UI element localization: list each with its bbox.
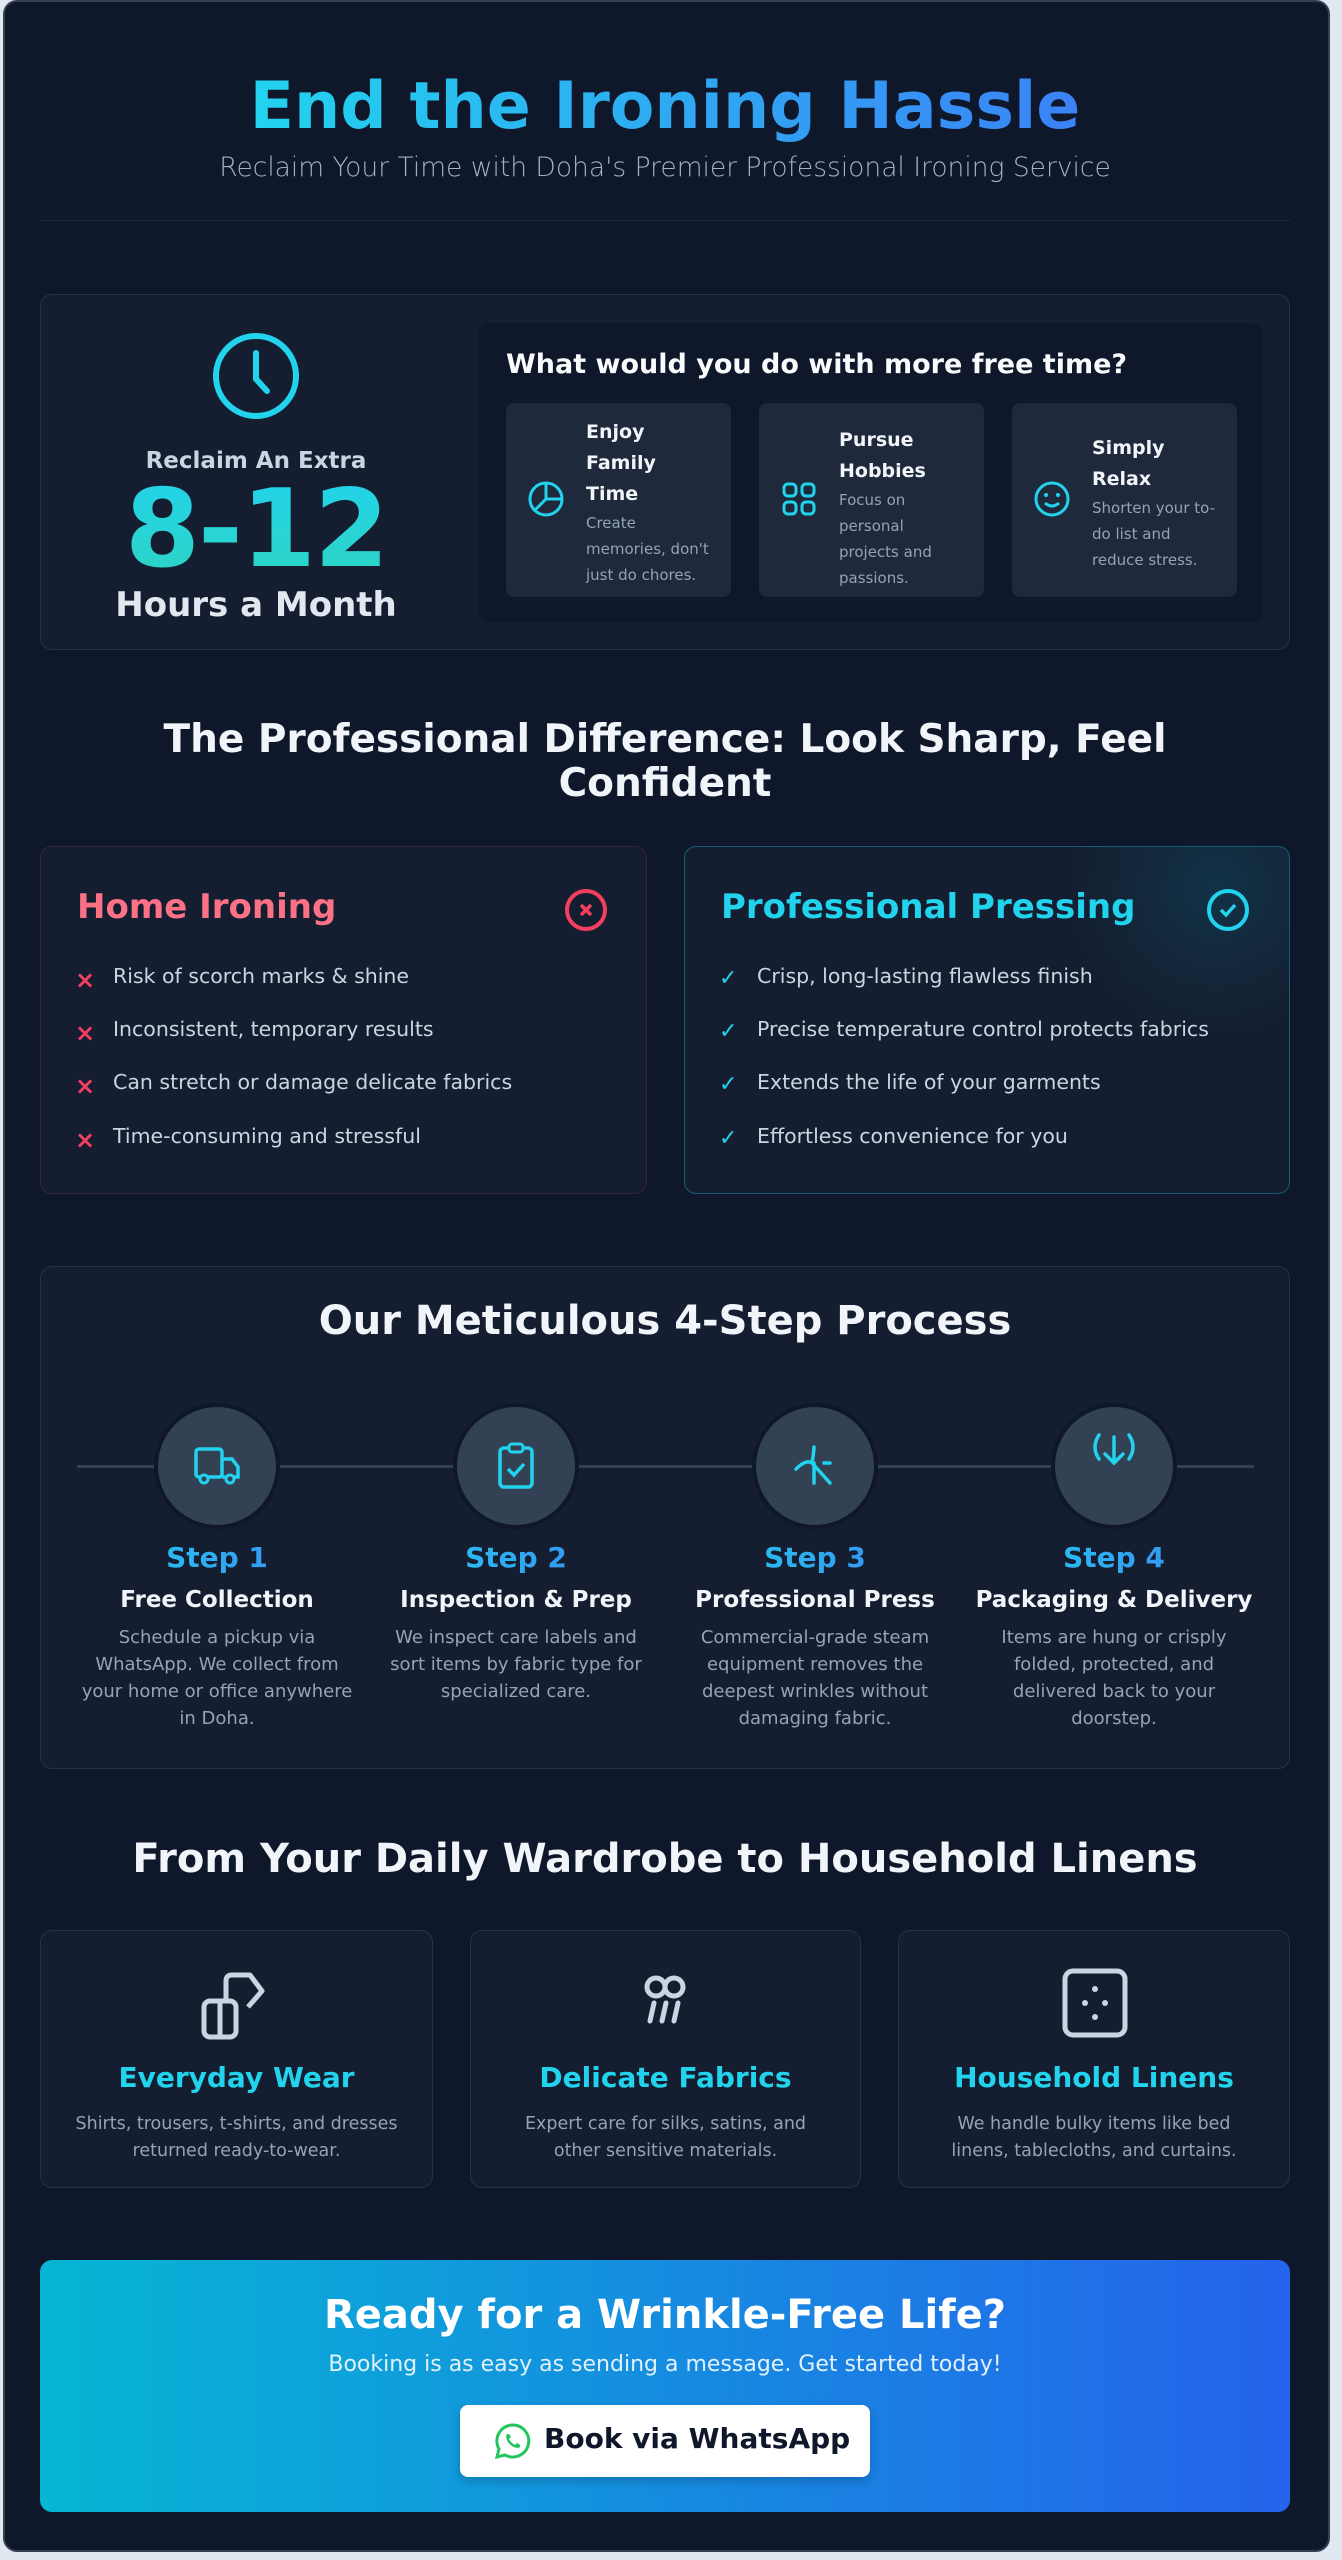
panel: professional pressing: Professional Pressing [721,887,1135,927]
card: hobbies [759,403,984,597]
panel: professional pressing [684,846,1290,1194]
button [460,2405,870,2477]
CTA heading: Ready for a Wrinkle-Free Life? [324,2292,1006,2338]
stat text: 8-12 [125,467,387,592]
heading: What would you do with more free time? [506,349,1127,380]
step 2: We inspect care labels and sort items by fabric type for specialized care. [390,1627,642,1702]
heading: process: Our Meticulous 4-Step Process [319,1298,1011,1344]
card: household linens: We handle bulky items like bed linens, tablecloths, and curtains. [951,2114,1237,2161]
title: End the Ironing Hassle [250,69,1080,144]
step 1: Free Collection [120,1587,314,1613]
list: ✓ [719,966,737,991]
step 1 [82,1407,352,1729]
card: delicate fabrics: Delicate Fabrics [539,2061,792,2094]
CTA subtext: Booking is as easy as sending a message. Get started today! [328,2352,1002,2377]
card: hobbies: Focus on personal projects and passions. [839,491,932,587]
step 2: Inspection & Prep [400,1587,632,1613]
panel: process [40,1266,1290,1769]
icon: whatsapp [495,2424,530,2459]
step 3: Professional Press [695,1587,935,1613]
card: family: Enjoy [586,421,644,443]
heading: professional difference: The Professional Difference: Look Sharp, Feel Confident [163,717,1166,806]
card: everyday wear: Shirts, trousers, t-shirts, and dresses returned ready-to-wear. [76,2114,398,2161]
list: ✓ [719,1072,737,1097]
list: Extends the life of your garments [757,1070,1101,1094]
free time box [479,323,1263,623]
step 4: Step 4 [1063,1541,1165,1574]
list: ✓ [719,1019,737,1044]
subtitle: Reclaim Your Time with Doha's Premier Professional Ironing Service [219,152,1111,183]
card: relax: Simply [1092,437,1164,459]
step 1: Step 1 [166,1541,268,1574]
list: Inconsistent, temporary results [113,1017,434,1041]
card: everyday wear: Everyday Wear [118,2061,355,2094]
card: family [506,403,731,597]
icon: x circle [565,889,607,931]
icon: clock [213,333,299,419]
step 3: Step 3 [764,1541,866,1574]
card: family: Family [586,452,656,474]
card: everyday wear [40,1930,433,2188]
list [719,964,1209,1151]
button: Book via WhatsApp [544,2422,850,2455]
icon: check circle [1207,889,1249,931]
list: ✓ [719,1126,737,1151]
stat text: Reclaim An Extra [146,448,366,474]
heading: wardrobe: From Your Daily Wardrobe to Household Linens [132,1836,1198,1882]
stat text [115,448,397,625]
card: delicate fabrics: Expert care for silks, satins, and other sensitive materials. [525,2114,806,2161]
card: relax [1012,403,1237,597]
step 2 [390,1407,642,1702]
card: household linens [898,1930,1290,2188]
card: household linens: Household Linens [954,2061,1234,2094]
list: Time-consuming and stressful [113,1124,421,1148]
list: × [75,1019,95,1047]
list: Can stretch or damage delicate fabrics [113,1070,512,1094]
card: family: Time [586,483,638,505]
list: × [75,1072,95,1100]
step 4: Items are hung or crisply folded, protected, and delivered back to your doorstep. [1001,1627,1227,1729]
list: × [75,966,95,994]
list: Risk of scorch marks & shine [113,964,409,988]
step 3: Commercial-grade steam equipment removes the deepest wrinkles without damaging fabric. [701,1627,929,1729]
step 4 [976,1407,1252,1729]
card: relax: Relax [1092,468,1151,490]
card: relax: Shorten your to-do list and reduce stress. [1092,499,1215,569]
card: hobbies: Hobbies [839,460,926,482]
panel: home ironing: Home Ironing [77,887,336,927]
step 4: Packaging & Delivery [976,1587,1252,1613]
step 3 [695,1407,935,1729]
card: hobbies: Pursue [839,429,914,451]
CTA banner [40,2260,1290,2512]
list [75,964,512,1154]
panel: time reclaimed [40,294,1290,650]
card: delicate fabrics [470,1930,861,2188]
step 1: Schedule a pickup via WhatsApp. We collect from your home or office anywhere in Doha. [82,1627,352,1729]
list: Crisp, long-lasting flawless finish [757,964,1093,988]
panel: home ironing [40,846,647,1194]
list: Effortless convenience for you [757,1124,1068,1148]
list: × [75,1126,95,1154]
list: Precise temperature control protects fabrics [757,1017,1209,1041]
card: family: Create memories, don't just do chores. [586,514,709,584]
stat text: Hours a Month [115,585,397,625]
step 2: Step 2 [465,1541,567,1574]
